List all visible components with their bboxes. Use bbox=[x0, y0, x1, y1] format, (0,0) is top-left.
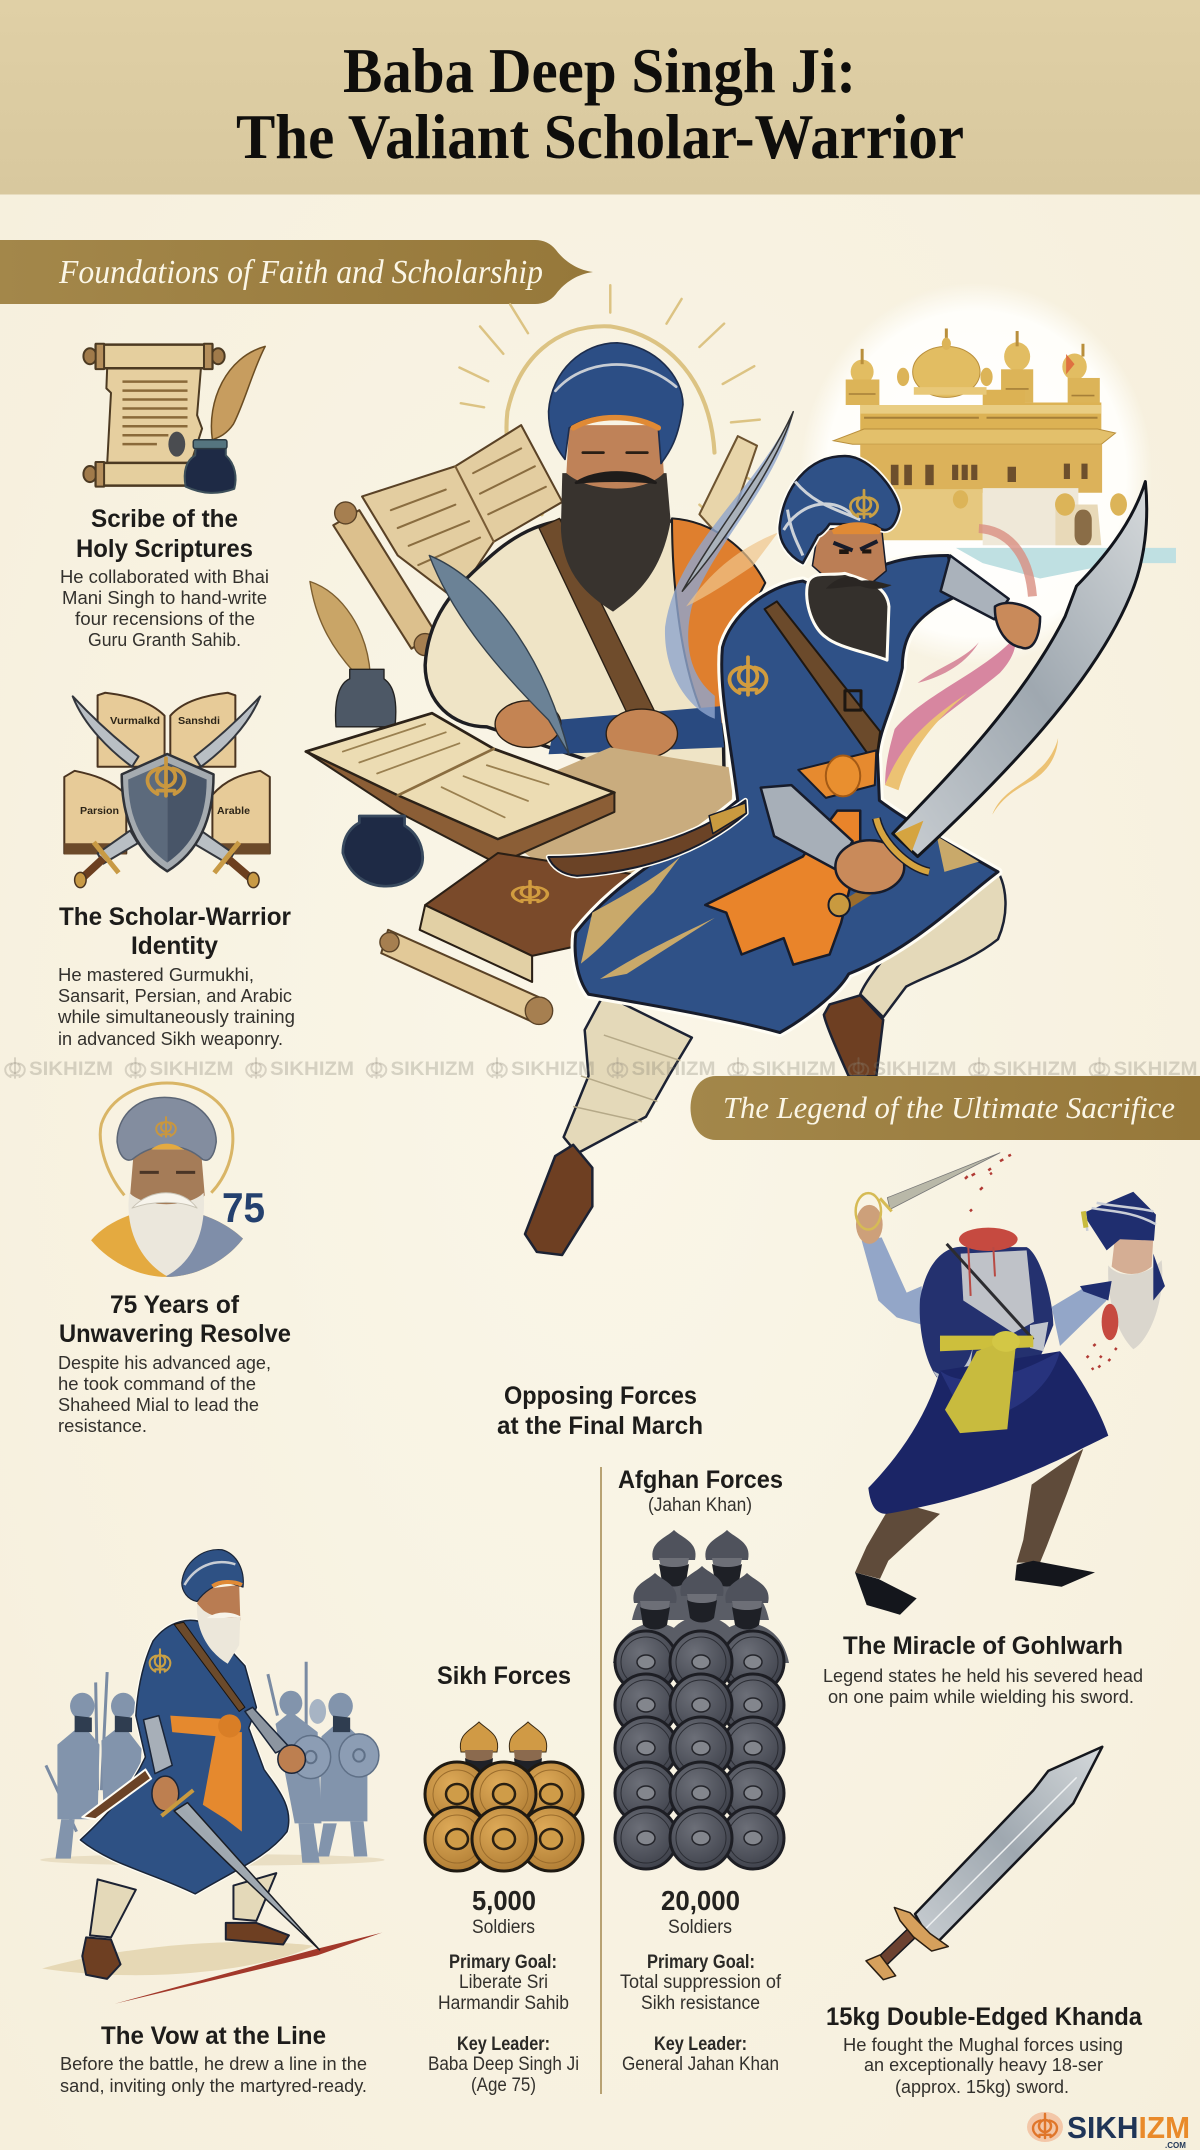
heading and text: 75 years of unwavering resolve: resistance. bbox=[58, 1415, 147, 1436]
arms bbox=[144, 1716, 172, 1774]
severed head bbox=[1108, 1260, 1162, 1349]
yellow belt and sash bbox=[940, 1336, 1033, 1351]
logo: sikhizm: SIKHIZM bbox=[1067, 2110, 1190, 2145]
illustration: scholar figure with books bbox=[306, 285, 765, 1024]
column: sikh forces bbox=[425, 1662, 583, 2096]
tunic bbox=[80, 1620, 289, 1894]
strap and buckle bbox=[765, 601, 880, 765]
icon: elderly portrait with 75: 75 bbox=[222, 1184, 265, 1231]
heading and text: 75 years of unwavering resolve: Despite his advanced age, bbox=[58, 1352, 271, 1373]
watermark strip: SIKHIZM bbox=[993, 1059, 1077, 1080]
column: sikh forces: Sikh Forces bbox=[437, 1662, 571, 1690]
soldiers and gold shields bbox=[425, 1722, 583, 1871]
logo: sikhizm: .COM bbox=[1165, 2141, 1186, 2150]
title banner bbox=[0, 0, 1200, 194]
heading and text: miracle of gohlwarh: on one paim while wielding his sword. bbox=[828, 1686, 1134, 1707]
scholar robe bbox=[425, 518, 724, 775]
heading and text: 75 years of unwavering resolve: Unwavering Resolve bbox=[59, 1320, 291, 1348]
lower arm bracer bbox=[761, 785, 853, 869]
icon: scholar-warrior shield, swords and books: Vurmalkd bbox=[110, 715, 160, 727]
heading and text: scribe of the holy scriptures: Scribe of the bbox=[91, 505, 238, 533]
watermark strip: SIKHIZM bbox=[270, 1059, 354, 1080]
heading and text: scribe of the holy scriptures: Mani Singh to hand-write bbox=[62, 587, 267, 608]
legs and shoes bbox=[90, 1879, 136, 1937]
heading and text: scholar-warrior identity: while simultaneously training bbox=[57, 1006, 295, 1027]
watermark strip bbox=[5, 1058, 1198, 1080]
closed book bbox=[425, 853, 656, 956]
column: sikh forces: Soldiers bbox=[472, 1917, 535, 1938]
watermark strip: SIKHIZM bbox=[150, 1059, 234, 1080]
scabbard bbox=[548, 800, 746, 876]
heading and text: 75 years of unwavering resolve: Shaheed Mial to lead the bbox=[58, 1394, 259, 1415]
heading and text: scribe of the holy scriptures: He collaborated with Bhai bbox=[60, 566, 269, 587]
column: sikh forces: Liberate Sri bbox=[459, 1972, 548, 1993]
heading and text: vow at the line: Before the battle, he drew a line in the bbox=[60, 2053, 367, 2074]
heading and text: double-edged khanda: (approx. 15kg) sword. bbox=[895, 2076, 1069, 2097]
heading and text: scholar-warrior identity: The Scholar-Warrior bbox=[59, 903, 291, 931]
heading and text: scribe of the holy scriptures: four recensions of the bbox=[75, 608, 255, 629]
open book upper bbox=[362, 425, 562, 599]
left arm bbox=[1052, 1286, 1107, 1346]
sash bbox=[705, 811, 860, 965]
arm with sword bbox=[862, 1237, 923, 1325]
comparison divider bbox=[600, 1467, 602, 2094]
torso bbox=[920, 1247, 1053, 1378]
icon: elderly portrait with 75 bbox=[91, 1083, 265, 1277]
watermark strip: SIKHIZM bbox=[29, 1059, 113, 1080]
column: sikh forces: Key Leader: bbox=[457, 2034, 550, 2055]
column: afghan forces: (Jahan Khan) bbox=[648, 1495, 752, 1516]
heading and text: scholar-warrior identity: Sansarit, Persian, and Arabic bbox=[58, 985, 292, 1006]
column: afghan forces: 20,000 bbox=[661, 1885, 740, 1916]
hilt and fist bbox=[837, 872, 899, 910]
left leg bbox=[564, 994, 692, 1153]
illustration: vow at the line bbox=[40, 1550, 385, 2004]
section banner: legend of the ultimate sacrifice bbox=[690, 1076, 1200, 1140]
head of scholar bbox=[561, 473, 671, 612]
column: afghan forces bbox=[613, 1466, 789, 2075]
heading and text: vow at the line: The Vow at the Line bbox=[101, 2022, 326, 2050]
heading and text: 75 years of unwavering resolve bbox=[58, 1291, 291, 1436]
heading and text: scribe of the holy scriptures: Guru Granth Sahib. bbox=[88, 629, 241, 650]
illustration: headless warrior holding his head bbox=[855, 1153, 1165, 1615]
title banner: The Valiant Scholar-Warrior bbox=[236, 101, 964, 172]
section banner: legend of the ultimate sacrifice: The Legend of the Ultimate Sacrifice bbox=[723, 1090, 1175, 1125]
inkwell with tan quill bbox=[310, 581, 370, 675]
column: afghan forces: Primary Goal: bbox=[647, 1952, 755, 1973]
column: afghan forces: Afghan Forces bbox=[618, 1466, 783, 1494]
heading and text: scholar-warrior identity: He mastered Gurmukhi, bbox=[58, 964, 254, 985]
bottom scroll bbox=[381, 930, 542, 1022]
open book front bbox=[306, 713, 614, 839]
heading and text: double-edged khanda: an exceptionally heavy 18-ser bbox=[864, 2054, 1103, 2075]
heading: opposing forces bbox=[497, 1382, 703, 1440]
section banner: foundations bbox=[0, 240, 593, 304]
watermark strip: SIKHIZM bbox=[752, 1059, 836, 1080]
heading and text: miracle of gohlwarh: Legend states he held his severed head bbox=[823, 1665, 1143, 1686]
heading and text: 75 years of unwavering resolve: he took command of the bbox=[58, 1373, 256, 1394]
watermark strip: SIKHIZM bbox=[872, 1059, 956, 1080]
scabbard bbox=[82, 1769, 151, 1819]
heading and text: double-edged khanda bbox=[826, 2003, 1143, 2097]
heading and text: scholar-warrior identity bbox=[57, 903, 295, 1049]
heading: opposing forces: at the Final March bbox=[497, 1412, 703, 1440]
heading and text: scholar-warrior identity: in advanced Sikh weaponry. bbox=[58, 1028, 283, 1049]
heading and text: miracle of gohlwarh: The Miracle of Gohlwarh bbox=[843, 1632, 1123, 1660]
halo and rays bbox=[459, 285, 760, 528]
column: afghan forces: Total suppression of bbox=[620, 1972, 782, 1993]
blade bbox=[893, 482, 1147, 857]
sash bbox=[170, 1716, 239, 1738]
watermark strip: SIKHIZM bbox=[1114, 1059, 1198, 1080]
heading and text: vow at the line bbox=[60, 2022, 367, 2096]
heading and text: scribe of the holy scriptures bbox=[60, 505, 269, 650]
blue quill bbox=[429, 555, 569, 754]
strap bbox=[174, 1622, 245, 1711]
heading: opposing forces: Opposing Forces bbox=[504, 1382, 697, 1410]
motion swooshes bbox=[665, 412, 793, 719]
column: sikh forces: (Age 75) bbox=[471, 2075, 536, 2096]
column: sikh forces: Primary Goal: bbox=[449, 1952, 557, 1973]
scroll left bbox=[333, 510, 436, 649]
column: sikh forces: Harmandir Sahib bbox=[438, 1993, 569, 2014]
heading and text: scholar-warrior identity: Identity bbox=[131, 932, 218, 960]
logo: sikhizm bbox=[1027, 2110, 1190, 2150]
illustration: warrior charging with talwar bbox=[525, 412, 1147, 1255]
right leg bbox=[860, 872, 1006, 1017]
column: sikh forces: 5,000 bbox=[472, 1885, 536, 1916]
column: afghan forces: General Jahan Khan bbox=[622, 2054, 779, 2075]
ink pot bbox=[343, 816, 423, 886]
heading and text: double-edged khanda: He fought the Mughal forces using bbox=[843, 2034, 1123, 2055]
head bbox=[812, 525, 886, 586]
column: afghan forces: Soldiers bbox=[668, 1917, 732, 1938]
heading and text: double-edged khanda: 15kg Double-Edged Khanda bbox=[826, 2003, 1143, 2031]
watermark strip: SIKHIZM bbox=[632, 1059, 716, 1080]
icon: scholar-warrior shield, swords and books: Sanshdi bbox=[178, 715, 220, 727]
title banner: Baba Deep Singh Ji: bbox=[343, 35, 856, 106]
scroll behind right bbox=[699, 436, 757, 542]
soldiers and dark shields bbox=[613, 1530, 789, 1869]
legs bbox=[855, 1501, 940, 1579]
heading and text: vow at the line: sand, inviting only the martyred-ready. bbox=[60, 2075, 367, 2096]
background soldiers bbox=[55, 1691, 367, 1863]
column: sikh forces: Baba Deep Singh Ji bbox=[428, 2054, 579, 2075]
column: afghan forces: Key Leader: bbox=[654, 2034, 747, 2055]
section banner: foundations: Foundations of Faith and Scholarship bbox=[58, 254, 543, 291]
table bbox=[466, 747, 734, 912]
column: afghan forces: Sikh resistance bbox=[641, 1993, 760, 2014]
tunic bbox=[575, 556, 998, 1033]
icon: double-edged khanda sword bbox=[866, 1747, 1102, 1980]
heading and text: scribe of the holy scriptures: Holy Scriptures bbox=[76, 535, 253, 563]
heading and text: 75 years of unwavering resolve: 75 Years of bbox=[110, 1291, 240, 1319]
icon: scholar-warrior shield, swords and books bbox=[64, 693, 270, 888]
watermark strip: SIKHIZM bbox=[390, 1059, 474, 1080]
skirt bbox=[868, 1351, 1108, 1514]
icon: scholar-warrior shield, swords and books: Parsion bbox=[80, 805, 119, 817]
heading and text: miracle of gohlwarh bbox=[823, 1632, 1143, 1707]
illustration: golden temple bbox=[800, 283, 1176, 665]
icon: scroll with quill and ink bbox=[83, 344, 265, 493]
sword bbox=[174, 1803, 320, 1950]
icon: scholar-warrior shield, swords and books: Arable bbox=[217, 805, 250, 817]
upper arm bracer and fist bbox=[941, 556, 1009, 619]
head bbox=[197, 1585, 240, 1622]
watermark strip: SIKHIZM bbox=[511, 1059, 595, 1080]
